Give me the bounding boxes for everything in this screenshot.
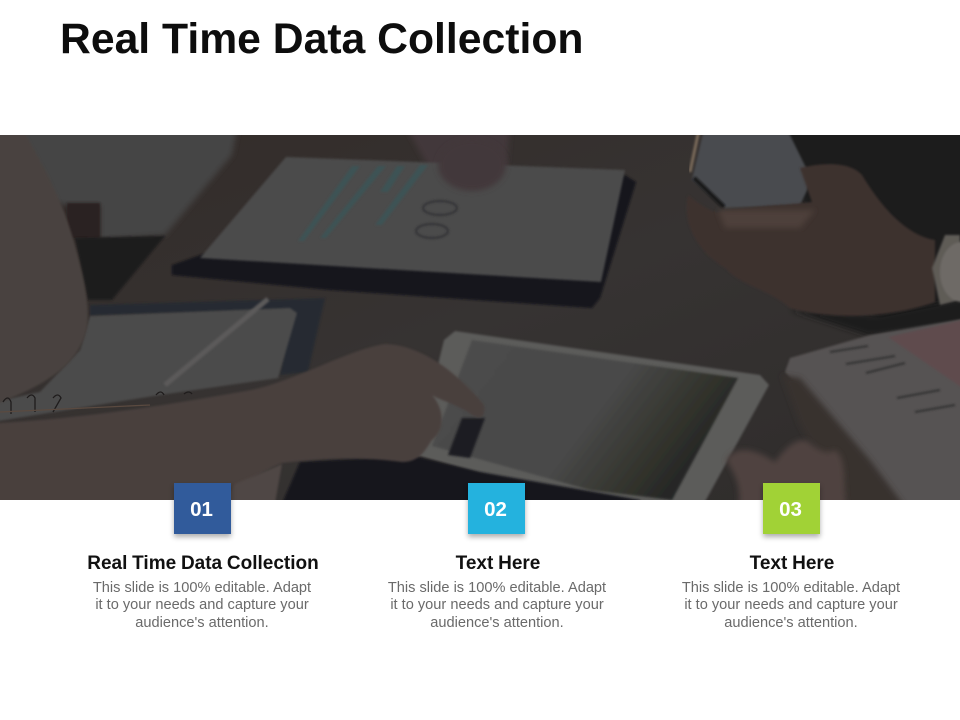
badge 03 — [763, 483, 820, 534]
open notebook — [0, 308, 297, 424]
badge 02: 02 — [484, 498, 507, 521]
pencil — [165, 299, 268, 385]
tablet — [416, 331, 769, 520]
phone — [692, 125, 812, 208]
paper under wrist — [214, 464, 282, 520]
badge 02 — [468, 483, 525, 534]
text block 1: it to your needs and capture your — [95, 597, 309, 613]
text block 3: audience's attention. — [724, 614, 858, 630]
chart bars — [298, 165, 428, 241]
dark gap under shirt — [75, 236, 165, 300]
text block 2: This slide is 100% editable. Adapt — [388, 580, 606, 596]
text block 3: it to your needs and capture your — [684, 597, 898, 613]
text block 3 — [682, 553, 900, 630]
blue folder — [90, 298, 325, 375]
finger highlight — [718, 210, 815, 228]
text block 1 — [87, 553, 319, 630]
phone edge — [690, 125, 700, 172]
badge 03: 03 — [779, 498, 802, 521]
reaching hand and arm — [0, 344, 484, 520]
left forearm — [0, 115, 88, 410]
notebook rings — [0, 392, 192, 414]
text block 1: This slide is 100% editable. Adapt — [93, 580, 311, 596]
brown block under shirt — [67, 203, 100, 238]
skin hand at top centre — [405, 125, 510, 192]
red newspaper section — [888, 316, 960, 400]
blurred hand at the bottom right — [726, 440, 850, 520]
badge 01: 01 — [190, 498, 213, 521]
text block 1: Real Time Data Collection — [87, 553, 319, 574]
text block 2 — [388, 553, 606, 630]
shirt at top left — [0, 115, 240, 240]
chart rings — [416, 201, 457, 238]
text block 2: Text Here — [456, 553, 540, 574]
fingers over the paper — [438, 139, 506, 191]
text block 2: it to your needs and capture your — [390, 597, 604, 613]
dark tablet shadow — [275, 456, 640, 520]
badge 01 — [174, 483, 231, 534]
newspaper lines — [830, 346, 955, 412]
photo: hands working with tablet, charts and phone on a table — [0, 135, 960, 500]
reflection on tablet at finger — [448, 418, 485, 458]
newspaper — [785, 316, 960, 520]
newspaper side and spiral — [782, 375, 915, 520]
text block 3: This slide is 100% editable. Adapt — [682, 580, 900, 596]
text block 1: audience's attention. — [135, 614, 269, 630]
dark band under the hand — [790, 295, 960, 336]
dark background top right — [760, 115, 960, 325]
watch — [932, 235, 960, 305]
text block 2: audience's attention. — [430, 614, 564, 630]
table surface — [0, 115, 960, 520]
chart paper — [200, 157, 625, 282]
title: Real Time Data Collection — [60, 15, 583, 63]
tablet screen — [432, 340, 738, 500]
hand holding phone — [687, 164, 935, 316]
text block 3: Text Here — [750, 553, 834, 574]
clipboard under chart paper — [172, 175, 636, 308]
